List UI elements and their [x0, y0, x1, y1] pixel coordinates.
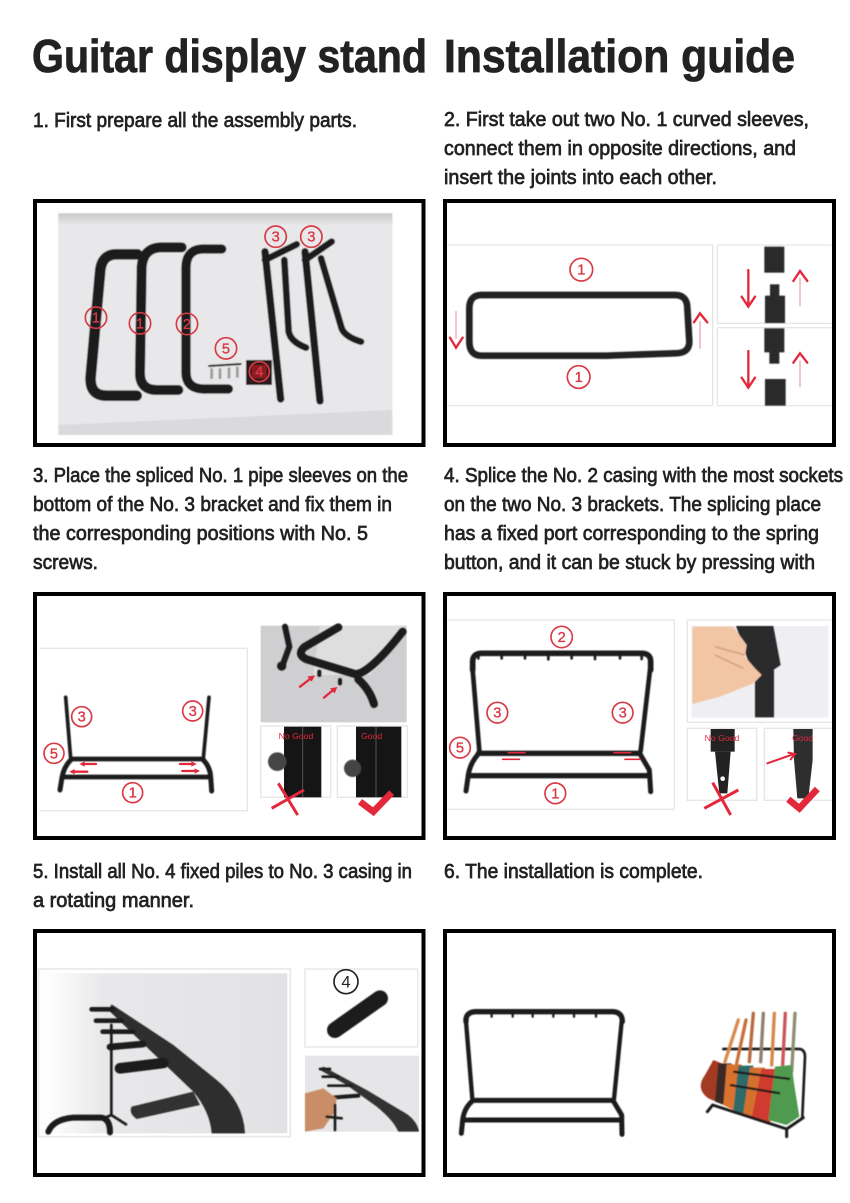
step 3 text: screws. — [33, 552, 98, 574]
photo of parts — [58, 213, 392, 435]
stand drawing — [466, 653, 651, 792]
finished stand drawing — [461, 1012, 622, 1134]
good photo — [764, 728, 832, 808]
part labels — [567, 258, 593, 388]
step 5 text: 5. Install all No. 4 fixed piles to No. 3 casing in — [33, 861, 412, 883]
part labels: 1 — [129, 786, 137, 802]
main photo — [39, 969, 290, 1137]
part labels: 3 — [493, 706, 501, 722]
step 4 text: has a fixed port corresponding to the spring — [444, 523, 819, 545]
part labels: 3 — [189, 704, 197, 720]
good photo: Good — [792, 733, 813, 743]
no good photo: No Good — [279, 731, 314, 741]
panel 1: assembly parts — [35, 201, 424, 445]
part labels — [450, 626, 633, 804]
step 6 text: 6. The installation is complete. — [444, 861, 703, 883]
image frames — [447, 245, 832, 406]
step 2 text: 2. First take out two No. 1 curved sleeves, — [444, 109, 809, 131]
part labels: 2 — [558, 630, 566, 646]
step 4 text — [444, 465, 843, 574]
part labels: 5 — [222, 341, 230, 357]
close-up photo — [261, 626, 407, 722]
part labels: 1 — [577, 263, 585, 279]
part labels: 3 — [272, 230, 280, 246]
panel 5: fixed piles — [35, 931, 424, 1175]
step 2 text — [444, 109, 809, 189]
stand base drawing — [60, 697, 212, 791]
step 5 text — [33, 861, 412, 912]
step 2 text: connect them in opposite directions, and — [444, 138, 796, 160]
hand close-up photo — [687, 620, 832, 722]
part 4 photo — [305, 969, 418, 1047]
sleeve loop — [469, 295, 689, 356]
red arrows — [69, 761, 200, 774]
install photo — [305, 1056, 419, 1132]
part labels: 1 — [136, 316, 144, 332]
step 5 text: a rotating manner. — [33, 890, 194, 912]
part labels: 3 — [619, 706, 627, 722]
step 2 text: insert the joints into each other. — [444, 167, 717, 189]
part labels: 2 — [183, 317, 191, 333]
step 3 text: bottom of the No. 3 bracket and fix them in — [33, 494, 392, 516]
arrows — [450, 270, 807, 388]
part labels — [44, 701, 203, 803]
step 3 text — [33, 465, 408, 574]
good photo — [337, 726, 407, 812]
part labels: 1 — [92, 311, 100, 327]
step 1 text: 1. First prepare all the assembly parts. — [33, 110, 357, 132]
panel 3: bracket and base assembly — [35, 594, 424, 838]
part labels: 4 — [255, 365, 263, 381]
step 3 text: 3. Place the spliced No. 1 pipe sleeves on the — [33, 465, 408, 487]
part labels: 1 — [575, 370, 583, 386]
red arrows — [503, 753, 640, 759]
part labels: 5 — [50, 746, 58, 762]
no good photo — [261, 726, 331, 815]
good photo: Good — [361, 731, 382, 741]
part labels: 1 — [551, 786, 559, 802]
part labels: 3 — [307, 230, 315, 246]
stand loaded with guitars — [701, 1013, 805, 1137]
part labels: 5 — [456, 741, 464, 757]
no good photo — [687, 728, 757, 815]
panel 6: finished stand — [445, 931, 834, 1175]
part labels — [85, 226, 322, 382]
panel 2: connecting curved sleeves — [445, 201, 834, 445]
title: Guitar display stand: Guitar display stand — [32, 30, 427, 82]
part 4 photo: 4 — [341, 973, 351, 992]
panel 4: top casing assembly — [445, 594, 834, 838]
joint close-ups — [764, 247, 786, 406]
step 4 text: button, and it can be stuck by pressing with — [444, 552, 815, 574]
part labels: 3 — [78, 710, 86, 726]
step 3 text: the corresponding positions with No. 5 — [33, 523, 368, 545]
title: Installation guide: Installation guide — [444, 30, 795, 82]
no good photo: No Good — [705, 733, 740, 743]
step 4 text: on the two No. 3 brackets. The splicing place — [444, 494, 821, 516]
